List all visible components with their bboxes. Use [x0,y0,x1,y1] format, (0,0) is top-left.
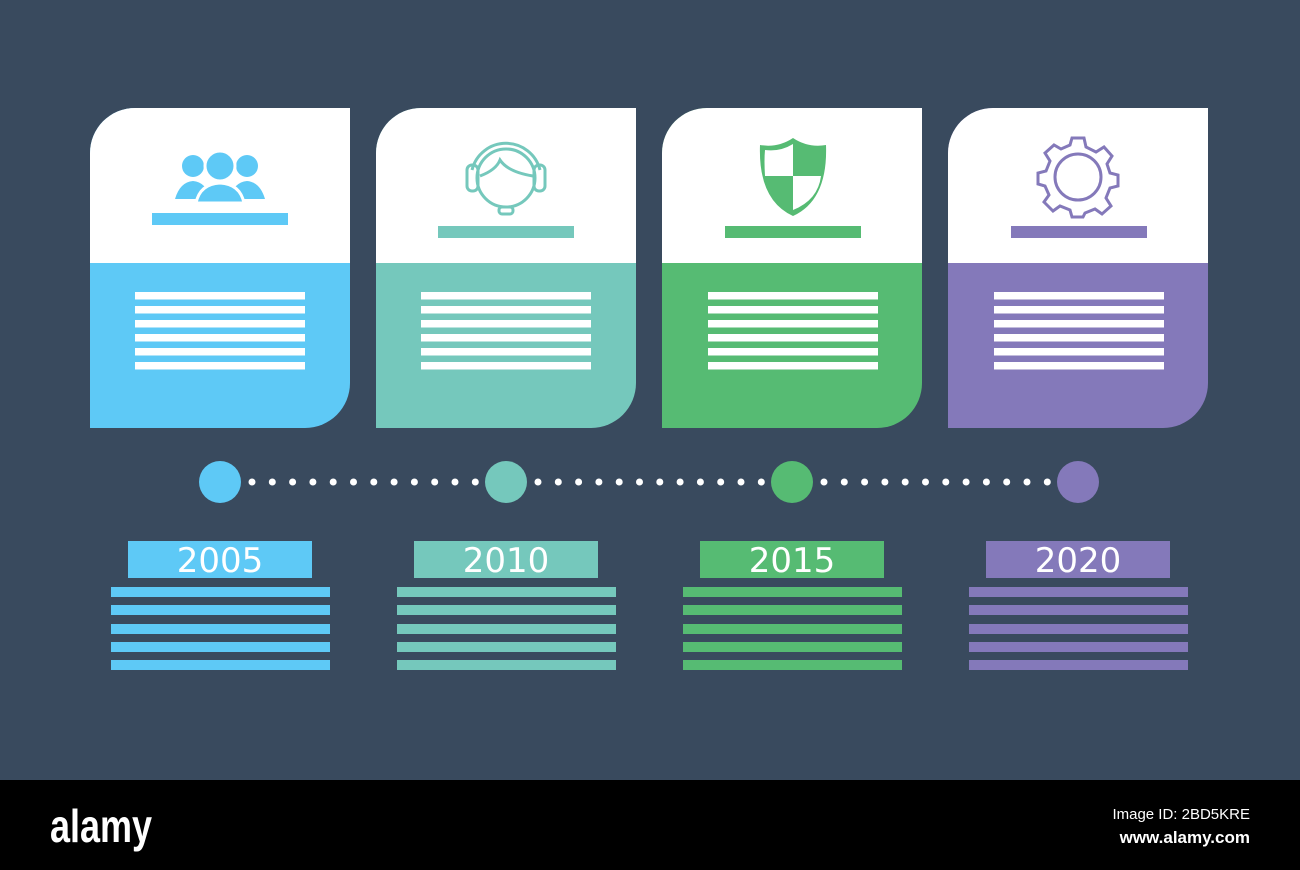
icon: headset [467,143,545,214]
text block [135,292,305,370]
year 2005 [111,541,330,670]
year 2010 [397,541,616,670]
year 2015: 2015 [749,541,835,581]
year 2020: 2020 [1035,541,1121,581]
watermark bar: alamy [50,800,152,852]
watermark bar [0,780,1300,870]
icon: people [175,151,265,203]
text block [708,292,878,370]
timeline [199,461,1099,503]
panel: card 3 [662,108,922,428]
icon: shield [760,138,826,216]
watermark bar: www.alamy.com [1119,828,1250,847]
year 2015 [683,541,902,670]
watermark bar: Image ID: 2BD5KRE [1112,806,1250,823]
text block [994,292,1164,370]
text block [421,292,591,370]
panel: card 1 [90,108,350,428]
panel: card 4 [948,108,1208,428]
icon: gear [1038,138,1118,217]
panel: card 2 [376,108,636,428]
year 2010: 2010 [463,541,549,581]
year 2020 [969,541,1188,670]
year 2005: 2005 [177,541,263,581]
